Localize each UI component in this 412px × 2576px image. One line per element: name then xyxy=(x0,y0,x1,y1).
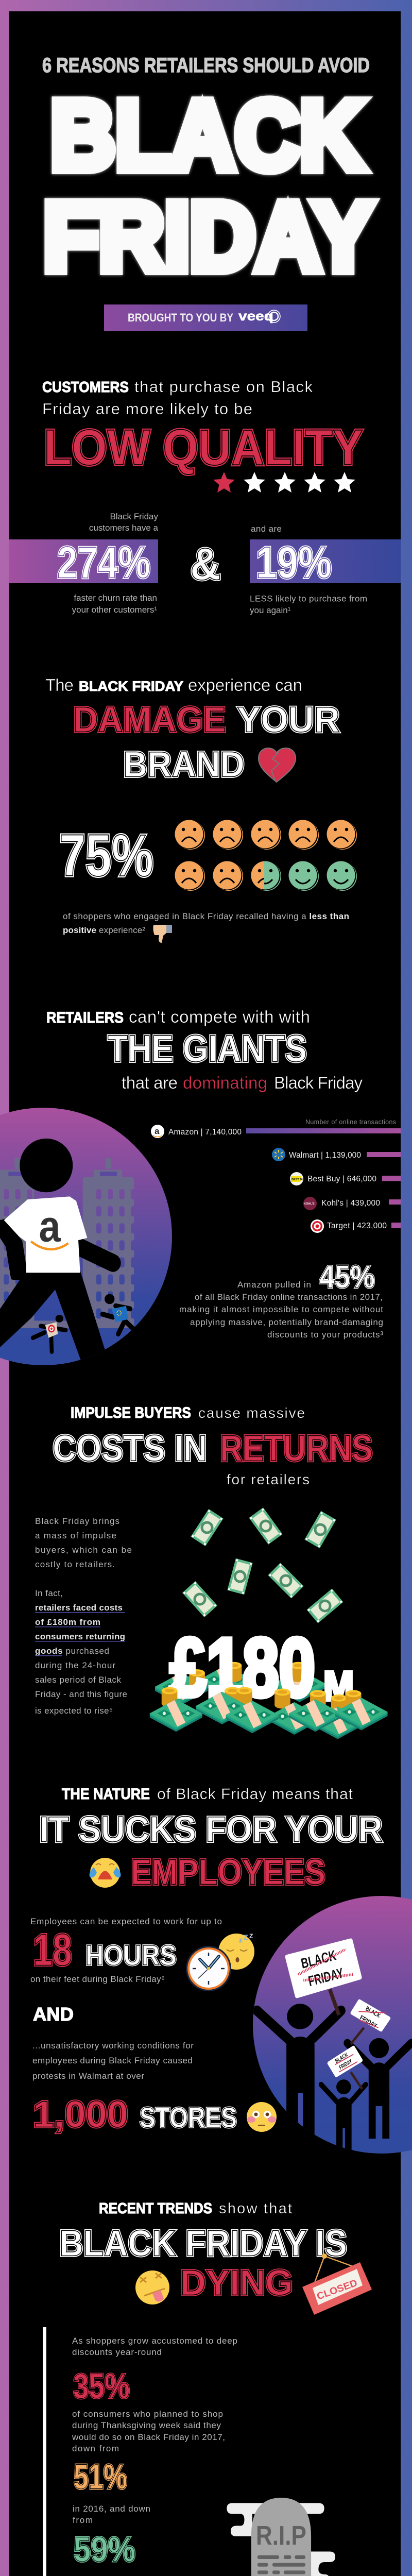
heading: costs in returns: COSTS IN xyxy=(53,1428,207,1469)
heading: damage your brand: YOUR xyxy=(237,700,340,740)
text block: returns explanation: In fact, xyxy=(35,1588,63,1598)
icon: gravestone xyxy=(227,2498,335,2576)
intro text: THE NATURE xyxy=(62,1786,150,1803)
text: decline statistics: would do so on Black Friday in 2017, xyxy=(72,2432,225,2442)
heading: black friday is dying: DYING xyxy=(180,2263,293,2303)
intro text: RETAILERS xyxy=(46,1009,124,1026)
heading: black friday is dying: BLACK FRIDAY IS xyxy=(59,2224,347,2264)
protester: child xyxy=(321,2079,366,2159)
stat caption: of shoppers who engaged in Black Friday recalled having a less than xyxy=(63,911,349,921)
intro text: The xyxy=(45,675,74,694)
stat: 51 percent: 51% xyxy=(74,2458,127,2497)
text block: returns explanation: is expected to rise⁵ xyxy=(35,1706,113,1716)
text: working conditions: protests in Walmart at over xyxy=(32,2071,144,2081)
icon: star rating one of five xyxy=(213,472,355,493)
stat: 274 percent churn: faster churn rate than xyxy=(74,593,157,603)
text: decline statistics: down from xyxy=(72,2444,119,2453)
big number: 180 million pounds: £180 xyxy=(170,1621,315,1714)
stat: 19 percent less likely xyxy=(250,524,401,615)
icon: sleeping emoji: z xyxy=(239,1936,243,1944)
intro text xyxy=(42,378,313,418)
icon: clock xyxy=(186,1946,231,1991)
text block: returns explanation: costly to retailers. xyxy=(35,1560,115,1569)
illustration: amazon giant with small retailers xyxy=(0,1108,172,1365)
sign: large xyxy=(287,1940,360,2015)
text block: returns explanation: goods purchased xyxy=(35,1646,109,1656)
intro text: show that xyxy=(219,2200,292,2217)
intro text: cause massive xyxy=(198,1405,305,1421)
icon: crying emoji xyxy=(90,1858,121,1888)
panel: the giants xyxy=(0,1007,401,1365)
icon: veeqo logo: veeq xyxy=(238,309,273,324)
heading: costs in returns xyxy=(53,1428,373,1469)
callout: amazon 45 percent: Amazon pulled in xyxy=(237,1280,311,1290)
bar: target xyxy=(311,1219,401,1233)
heading: it sucks for your employees xyxy=(39,1809,383,1892)
stat: 75 percent: 75% xyxy=(59,823,153,889)
sign: large: FRIDAY xyxy=(307,1965,345,1990)
intro text: of Black Friday means that xyxy=(157,1786,353,1803)
big number: 180 million pounds: M xyxy=(323,1663,354,1709)
icon: thumbs down xyxy=(153,925,172,943)
sign: small xyxy=(329,2047,362,2089)
text: 18 hours xyxy=(30,1917,222,1984)
heading: it sucks for your employees: EMPLOYEES xyxy=(131,1852,325,1892)
text block: returns explanation: consumers returning xyxy=(35,1632,125,1641)
text: 18 hours: 18 xyxy=(33,1925,72,1975)
icon: dizzy emoji xyxy=(135,2270,169,2304)
text block: returns explanation: retailers faced costs xyxy=(35,1603,123,1613)
pictogram: ten faces, 75 percent sad xyxy=(175,820,357,891)
stat: 19 percent less likely: LESS likely to purchase from xyxy=(250,594,367,604)
icon: closed sign xyxy=(302,2253,372,2315)
text block: returns explanation: a mass of impulse xyxy=(35,1531,116,1540)
intro text xyxy=(99,2200,292,2217)
bar: amazon: a xyxy=(154,1126,160,1136)
bar: walmart: Walmart | 1,139,000 xyxy=(289,1151,361,1160)
stat: 19 percent less likely: you again¹ xyxy=(250,605,291,615)
intro text: BLACK FRIDAY xyxy=(79,679,183,694)
stat: 274 percent churn: your other customers¹ xyxy=(72,605,157,615)
subheading: Black Friday xyxy=(274,1073,363,1092)
bar: target: Target | 423,000 xyxy=(327,1222,387,1230)
intro text: can't compete with with xyxy=(129,1007,310,1026)
callout: amazon 45 percent xyxy=(179,1259,383,1340)
heading: black friday is dying: DYING xyxy=(180,2263,293,2303)
heading: damage your brand: BRAND xyxy=(123,744,245,784)
stat: 274 percent churn: customers have a xyxy=(89,523,159,533)
intro text: IMPULSE BUYERS xyxy=(71,1404,191,1421)
title: FRIDAY: FRIDAY xyxy=(43,182,373,291)
panel: damage your brand xyxy=(45,675,357,943)
stat caption: positive experience² xyxy=(63,925,145,935)
panel: black friday is dying xyxy=(36,2200,372,2576)
callout: amazon 45 percent: 45% xyxy=(319,1259,375,1295)
text: 1,000 stores: STORES xyxy=(140,2102,237,2133)
intro text: that purchase on Black xyxy=(134,378,313,396)
icon: flushed emoji xyxy=(247,2102,277,2132)
subheading: for retailers xyxy=(227,1471,310,1487)
heading: damage your brand: DAMAGE xyxy=(73,700,226,740)
heading: costs in returns: COSTS IN xyxy=(53,1428,207,1469)
panel: low quality customers xyxy=(9,378,401,615)
intro text: RECENT TRENDS xyxy=(99,2200,212,2217)
callout: amazon 45 percent: of all Black Friday online transactions in 2017, xyxy=(195,1292,383,1302)
text block: returns explanation: Black Friday brings xyxy=(35,1516,119,1526)
giant figure: a xyxy=(39,1202,61,1251)
stat: 59 percent: 59% xyxy=(74,2530,135,2569)
callout: amazon 45 percent: 45% xyxy=(319,1259,375,1295)
sponsor banner top xyxy=(104,304,307,331)
heading: damage your brand: BRAND xyxy=(123,744,245,784)
text: working conditions: ...unsatisfactory working conditions for xyxy=(32,2041,194,2050)
stat: 19 percent less likely: and are xyxy=(251,524,282,534)
bar chart: online transactions: Number of online transactions xyxy=(305,1118,396,1126)
sign: small: FRIDAY xyxy=(338,2058,353,2071)
text: 1,000 stores: 1,000 xyxy=(33,2094,128,2135)
intro text xyxy=(46,1007,310,1026)
small walmart runner xyxy=(102,1294,134,1334)
title block xyxy=(42,54,373,291)
icon: closed sign: CLOSED xyxy=(316,2278,359,2302)
stat: 35 percent: 35% xyxy=(73,2367,130,2406)
stat: 274 percent churn: 274% xyxy=(57,538,150,587)
stat: 274 percent churn xyxy=(9,512,159,615)
text block: returns explanation: during the 24-hour xyxy=(35,1660,115,1670)
bar: best buy xyxy=(290,1172,401,1185)
text: 1,000 stores: STORES xyxy=(140,2102,237,2133)
illustration: protesters with signs xyxy=(253,1896,412,2159)
heading: damage your brand: YOUR xyxy=(237,700,340,740)
callout: amazon 45 percent: making it almost impossible to compete without xyxy=(179,1304,383,1314)
bar: walmart xyxy=(272,1148,401,1161)
heading: the giants: THE GIANTS xyxy=(108,1028,307,1070)
bar chart: online transactions xyxy=(151,1118,401,1233)
stat: 75 percent: 75% xyxy=(59,823,153,889)
stat: 274 percent churn: 274% xyxy=(57,538,150,587)
text: working conditions: employees during Black Friday caused xyxy=(32,2056,193,2065)
panel: sucks for employees xyxy=(30,1786,412,2159)
text block: returns explanation: buyers, which can be xyxy=(35,1545,132,1555)
text: working conditions xyxy=(32,2041,194,2081)
stat caption xyxy=(63,911,349,935)
callout: amazon 45 percent: discounts to your products³ xyxy=(267,1330,383,1340)
heading: black friday is dying xyxy=(59,2224,347,2303)
intro text xyxy=(62,1786,353,1803)
heading: it sucks for your employees: IT SUCKS FOR YOUR xyxy=(39,1809,383,1850)
text: 18 hours: HOURS xyxy=(85,1939,177,1971)
text block: returns explanation: Friday - and this figure xyxy=(35,1689,127,1699)
sign: medium xyxy=(351,2001,389,2044)
subheading: that are xyxy=(122,1073,178,1092)
small target runner xyxy=(33,1315,66,1352)
title: BLACK: BLACK xyxy=(50,81,365,190)
heading: the giants: THE GIANTS xyxy=(108,1028,307,1070)
bar: kohl's xyxy=(303,1197,401,1210)
icon: gravestone: R.I.P xyxy=(256,2521,306,2551)
ampersand: & xyxy=(190,538,221,589)
text: decline statistics: of consumers who planned to shop xyxy=(72,2409,223,2419)
buildings xyxy=(0,1158,134,1328)
heading: damage your brand: DAMAGE xyxy=(73,700,226,740)
stat: 35 percent: 35% xyxy=(73,2367,130,2406)
text: 18 hours: Employees can be expected to work for up to xyxy=(30,1917,222,1926)
text: 18 hours: on their feet during Black Friday⁶ xyxy=(30,1974,165,1984)
text: and: AND xyxy=(33,2004,74,2025)
protester: large xyxy=(257,2004,341,2159)
heading: it sucks for your employees: EMPLOYEES xyxy=(131,1852,325,1892)
heading: low quality: LOW QUALITY xyxy=(44,419,363,476)
intro text: experience can xyxy=(188,675,302,694)
heading: black friday is dying: BLACK FRIDAY IS xyxy=(59,2224,347,2264)
intro text: CUSTOMERS xyxy=(42,379,129,396)
text: 18 hours: HOURS xyxy=(85,1939,177,1971)
text block: returns explanation: sales period of Black xyxy=(35,1675,122,1685)
bar: best buy: BEST BUY xyxy=(291,1178,306,1181)
bar: kohl's: Kohl's | 439,000 xyxy=(321,1199,380,1208)
stat: 274 percent churn: Black Friday xyxy=(110,512,158,521)
giant figure xyxy=(0,1139,113,1362)
heading: costs in returns: RETURNS xyxy=(220,1428,373,1469)
heading: costs in returns: RETURNS xyxy=(220,1428,373,1469)
text: decline statistics: discounts year-round xyxy=(72,2347,162,2357)
money pile, front xyxy=(150,1687,388,1739)
heading: low quality: LOW QUALITY xyxy=(44,419,363,476)
intro text xyxy=(71,1404,305,1421)
icon: sleeping emoji xyxy=(218,1933,254,1970)
sign: small: BLACK xyxy=(334,2052,349,2064)
text: decline statistics: As shoppers grow accustomed to deep xyxy=(72,2336,237,2346)
ampersand: & xyxy=(190,538,221,589)
protester: right xyxy=(347,2038,411,2139)
text: decline statistics: from xyxy=(73,2515,93,2525)
text: 1,000 stores: 1,000 xyxy=(33,2094,128,2135)
text: decline statistics xyxy=(72,2336,237,2576)
intro text: Friday are more likely to be xyxy=(42,400,252,418)
icon: sleeping emoji: Z xyxy=(249,1933,253,1940)
icon: falling banknotes xyxy=(182,1507,343,1623)
text: decline statistics: in 2016, and down xyxy=(73,2504,150,2514)
text: decline statistics: during Thanksgiving week said they xyxy=(72,2420,221,2430)
sign: medium: FRIDAY xyxy=(359,2013,378,2030)
stat: 19 percent less likely: 19% xyxy=(256,538,332,587)
sign: medium: BLACK xyxy=(365,2005,382,2020)
bar: amazon xyxy=(151,1125,401,1138)
text block: returns explanation xyxy=(35,1516,132,1716)
sign: large: BLACK xyxy=(300,1947,337,1972)
callout: amazon 45 percent: applying massive, potentially brand-damaging xyxy=(190,1317,383,1327)
heading: damage your brand xyxy=(73,700,340,784)
icon: broken heart xyxy=(259,748,296,782)
bar: kohl's: KOHL'S xyxy=(304,1202,315,1206)
text block: returns explanation: of £180m from xyxy=(35,1617,100,1627)
text: 18 hours: 18 xyxy=(33,1925,72,1975)
stat: 19 percent less likely: 19% xyxy=(256,538,332,587)
intro text xyxy=(45,675,302,694)
arrow: downward trend xyxy=(36,2327,53,2576)
icon: sleeping emoji: Z xyxy=(244,1933,248,1941)
stat: 59 percent: 59% xyxy=(74,2530,135,2569)
heading: it sucks for your employees: IT SUCKS FOR YOUR xyxy=(39,1809,383,1850)
panel: costs in returns xyxy=(35,1404,388,1739)
bar: best buy: Best Buy | 646,000 xyxy=(307,1175,376,1183)
money pile, rear xyxy=(155,1662,326,1705)
stat: 51 percent: 51% xyxy=(74,2458,127,2497)
sponsor banner top: BROUGHT TO YOU BY xyxy=(128,311,233,324)
subheading xyxy=(122,1073,363,1092)
bar: amazon: Amazon | 7,140,000 xyxy=(168,1128,242,1137)
text: 1,000 stores xyxy=(33,2094,237,2135)
subheading: dominating xyxy=(183,1073,267,1092)
